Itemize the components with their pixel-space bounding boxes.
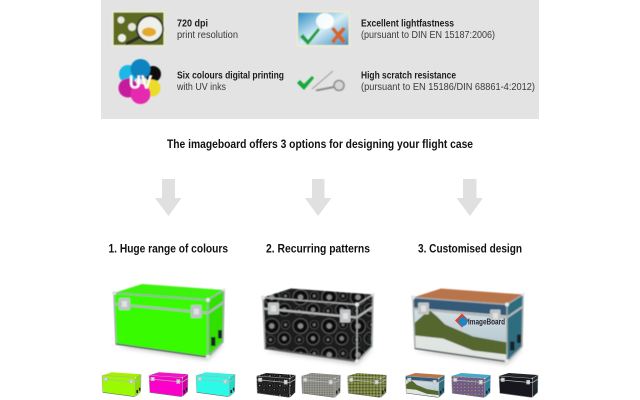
arrow: option 2 <box>305 179 332 216</box>
thumbnail: black logo <box>498 373 539 398</box>
thumbnail: skulls <box>301 373 341 398</box>
icon: lightfastness sky <box>296 11 350 46</box>
thumbnail: camouflage <box>347 373 387 398</box>
thumbnail row: custom designs <box>405 373 539 398</box>
icon: UV ink petals: UV <box>129 72 152 92</box>
thumbnail: landscape <box>405 373 445 398</box>
title: The imageboard offers 3 options for designing your flight case <box>167 139 473 151</box>
thumbnail: coral reef <box>451 373 491 398</box>
icon: daisy photo with magnifier <box>112 11 165 46</box>
arrow: option 1 <box>155 179 182 216</box>
icon: UV ink petals <box>118 59 161 104</box>
text: lightfastness: (pursuant to DIN EN 15187:2006) <box>361 30 495 41</box>
flight case: green <box>112 284 226 360</box>
heading: option 3: 3. Customised design <box>418 244 522 256</box>
flight case: custom landscape <box>411 288 524 364</box>
text: scratch resistance: High scratch resistance <box>361 70 456 82</box>
text: six colours: Six colours digital printing <box>177 70 284 82</box>
thumbnail: cyan <box>195 372 236 397</box>
text: scratch resistance: (pursuant to EN 15186/DIN 68861-4:2012) <box>361 82 535 93</box>
text: 720 dpi: 720 dpi <box>177 18 208 30</box>
text: scratch resistance <box>361 70 535 93</box>
text: 720 dpi <box>177 18 238 41</box>
flight case: speaker pattern <box>261 288 374 364</box>
thumbnail row: colours <box>101 372 236 397</box>
heading: option 2: 2. Recurring patterns <box>266 244 370 256</box>
thumbnail: magenta <box>148 372 189 397</box>
icon: check with nail and key <box>297 71 344 90</box>
thumbnail row: patterns <box>256 373 387 398</box>
text: lightfastness <box>361 18 495 41</box>
heading: option 1: 1. Huge range of colours <box>108 244 228 256</box>
arrow: option 3 <box>456 179 483 216</box>
text: six colours: with UV inks <box>176 82 226 93</box>
thumbnail: lime <box>101 372 142 397</box>
logo: imageBoard: ImageBoard <box>468 318 505 326</box>
text: six colours <box>176 70 284 93</box>
panel: print features <box>101 0 539 119</box>
thumbnail: speakers <box>256 373 296 398</box>
text: 720 dpi: print resolution <box>177 30 238 41</box>
text: lightfastness: Excellent lightfastness <box>361 18 454 30</box>
